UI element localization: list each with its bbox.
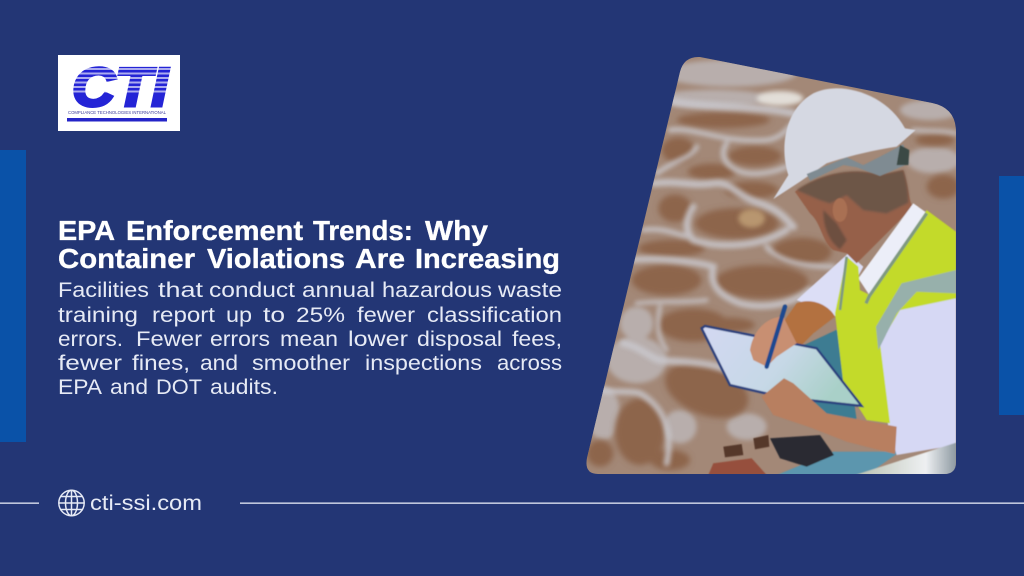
body text: hazardous (382, 279, 492, 302)
body text: fines, (132, 352, 190, 375)
title (58, 215, 560, 274)
worker figure (702, 88, 956, 475)
title: Why (425, 215, 488, 246)
body text (58, 279, 562, 399)
body text: waste (497, 279, 562, 302)
trousers and teal shadow (804, 329, 857, 420)
body text: report (152, 304, 215, 327)
body text: errors. (58, 328, 123, 351)
water: grey upper area and foam patches (587, 60, 960, 443)
body text: 25% (296, 304, 345, 327)
body text: and (110, 376, 148, 399)
logo: CTI: COMPLIANCE TECHNOLOGIES INTERNATIONAL (68, 110, 166, 115)
icon: globe (59, 490, 84, 516)
body text: errors (210, 328, 270, 351)
body text: EPA (58, 376, 102, 399)
logo: CTI (58, 55, 180, 131)
body text: smoother (252, 352, 350, 375)
arm and writing hand (784, 300, 836, 345)
title: Are (355, 243, 405, 274)
footer line left (0, 502, 39, 504)
body text: conduct (209, 279, 295, 302)
body text: annual (302, 279, 375, 302)
title: EPA (58, 215, 115, 246)
logo: CTI: CTI (72, 56, 170, 118)
body text: and (200, 352, 238, 375)
pipe (855, 443, 956, 475)
title: Enforcement (126, 215, 303, 246)
pen (767, 307, 785, 367)
clipboard (702, 326, 862, 406)
shirt sleeve and back (797, 253, 863, 317)
body text: to (263, 304, 285, 327)
title: Container (58, 243, 195, 274)
neck and head (795, 170, 913, 263)
body text: across (497, 352, 562, 375)
website: cti-ssi.com (90, 492, 202, 515)
body text: DOT (156, 376, 202, 399)
body text: that (158, 279, 203, 302)
title: Violations (207, 243, 345, 274)
body text: Fewer (136, 328, 202, 351)
body text: up (226, 304, 252, 327)
chain and brick (708, 458, 767, 475)
body text: mean (280, 328, 338, 351)
body text: Facilities (58, 279, 149, 302)
body text: classification (427, 304, 562, 327)
lower hand and forearm (762, 378, 897, 454)
foam lines (600, 102, 956, 463)
glove (770, 435, 834, 467)
body text: lower (348, 328, 408, 351)
body text: audits. (210, 376, 278, 399)
title: Trends: (313, 215, 413, 246)
left accent bar (0, 150, 26, 442)
body text: training (58, 304, 138, 327)
high-vis vest (835, 210, 956, 423)
helmet (773, 88, 916, 199)
title: Increasing (415, 243, 560, 274)
body text: inspections (365, 352, 482, 375)
photo: worker with clipboard at wastewater tank (580, 50, 960, 480)
brown sediment patches (587, 112, 960, 470)
body text: fewer (58, 352, 122, 375)
body text: fees, (512, 328, 562, 351)
collar (858, 203, 927, 295)
body text: disposal (417, 328, 502, 351)
body text: fewer (357, 304, 415, 327)
right accent bar (999, 176, 1024, 415)
footer line right (240, 502, 1024, 504)
